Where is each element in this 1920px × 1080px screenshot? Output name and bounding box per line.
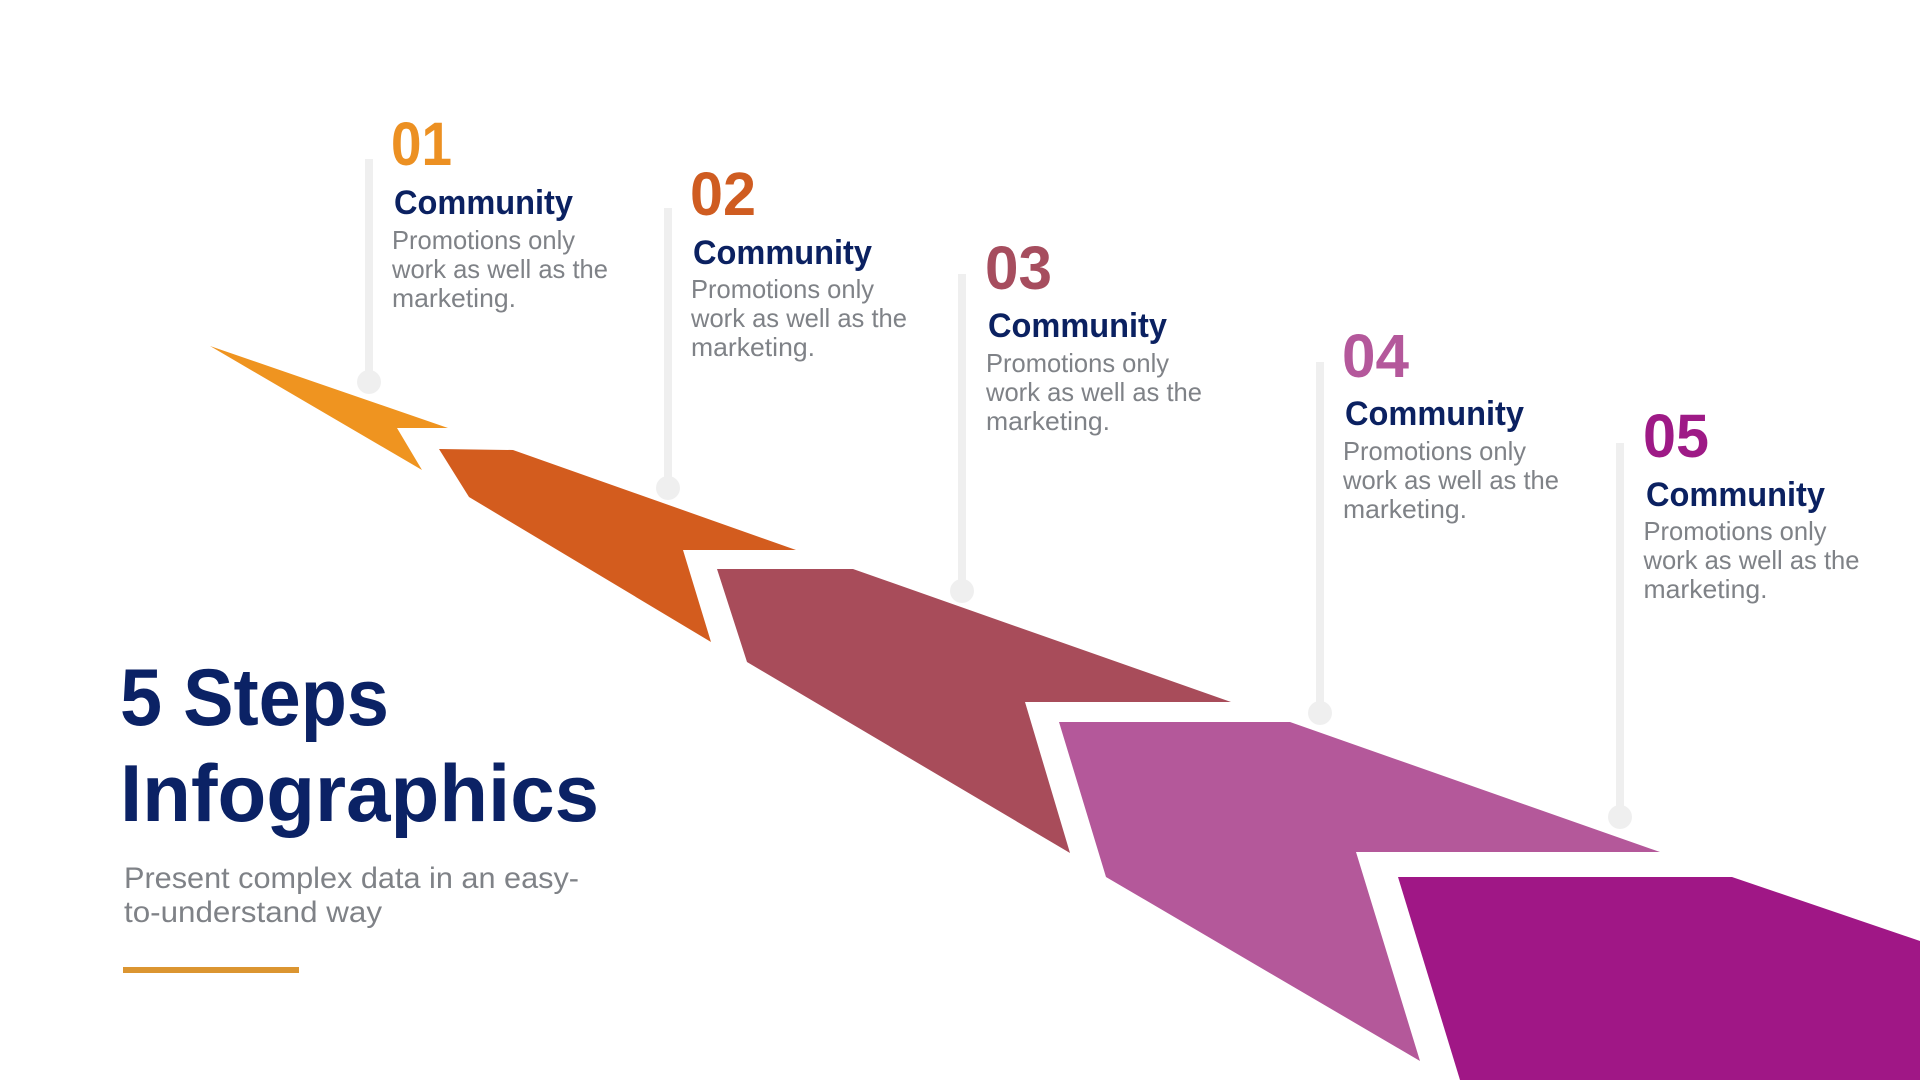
description 02 xyxy=(690,274,907,362)
description 05: Promotions only xyxy=(1644,516,1826,546)
description 05: marketing. xyxy=(1644,574,1768,604)
number 04: 04 xyxy=(1342,322,1409,390)
number 03: 03 xyxy=(985,234,1052,302)
number 05: 05 xyxy=(1643,402,1709,470)
chevron 3: brick red xyxy=(717,569,1231,853)
heading 04: Community xyxy=(1345,395,1524,433)
step 05 xyxy=(1608,402,1860,829)
title xyxy=(120,653,599,839)
description 05: work as well as the xyxy=(1643,545,1860,575)
heading 01: Community xyxy=(394,184,573,222)
connector line and dot 04 xyxy=(1308,362,1332,725)
subtitle: to-understand way xyxy=(124,896,382,929)
chevron 5: purple xyxy=(1398,877,1920,1080)
number 01: 01 xyxy=(391,110,452,178)
description 03: Promotions only xyxy=(986,348,1169,378)
description 03 xyxy=(985,348,1202,436)
description 02: Promotions only xyxy=(691,274,874,304)
description 01: marketing. xyxy=(392,283,516,313)
heading 05: Community xyxy=(1646,476,1825,514)
description 04: work as well as the xyxy=(1342,465,1559,495)
description 01 xyxy=(391,225,608,313)
step 02 xyxy=(656,160,907,500)
heading 02: Community xyxy=(693,234,872,272)
heading 03: Community xyxy=(988,307,1167,345)
arrow chain: five rising chevrons xyxy=(210,346,1920,1080)
title: 5 Steps xyxy=(120,653,389,743)
connector line and dot 05 xyxy=(1608,443,1632,829)
step 01 xyxy=(357,110,608,394)
description 01: Promotions only xyxy=(392,225,575,255)
subtitle xyxy=(124,862,579,929)
chevron 1: orange xyxy=(210,346,448,470)
description 05 xyxy=(1643,516,1860,604)
description 04: Promotions only xyxy=(1343,436,1526,466)
accent underline xyxy=(123,967,299,973)
description 03: marketing. xyxy=(986,406,1110,436)
description 02: marketing. xyxy=(691,332,815,362)
step 03 xyxy=(950,234,1202,603)
description 04 xyxy=(1342,436,1559,524)
description 03: work as well as the xyxy=(985,377,1202,407)
title: Infographics xyxy=(120,749,599,839)
connector line and dot 01 xyxy=(357,159,381,394)
step 04 xyxy=(1308,322,1559,725)
description 04: marketing. xyxy=(1343,494,1467,524)
connector line and dot 03 xyxy=(950,274,974,603)
number 02: 02 xyxy=(690,160,756,228)
chevron 4: pink xyxy=(1059,722,1660,1061)
description 02: work as well as the xyxy=(690,303,907,333)
description 01: work as well as the xyxy=(391,254,608,284)
connector line and dot 02 xyxy=(656,208,680,500)
chevron 2: burnt orange xyxy=(439,449,796,642)
subtitle: Present complex data in an easy- xyxy=(124,862,579,895)
